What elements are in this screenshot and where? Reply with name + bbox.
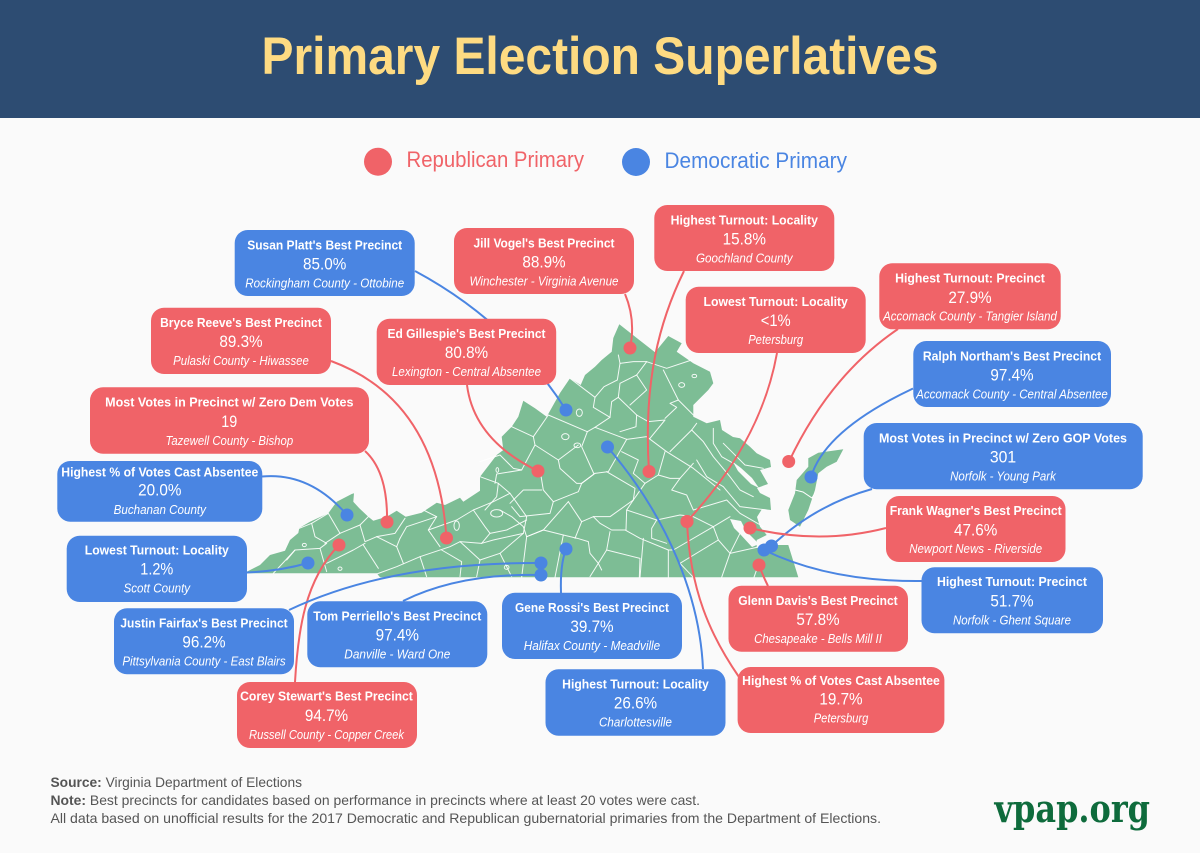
callout: Highest turnout Tangier: 27.9% bbox=[948, 289, 992, 307]
callout: Highest turnout Tangier bbox=[879, 263, 1061, 329]
callout: Ed Gillespie: Ed Gillespie's Best Precinct bbox=[388, 326, 546, 341]
callout: Frank Wagner bbox=[886, 496, 1066, 562]
callout: Highest absentee Petersburg: Highest % of Votes Cast Absentee bbox=[742, 673, 940, 688]
callout: Tom Perriello bbox=[307, 601, 487, 667]
legend: Republican Primary bbox=[406, 147, 584, 172]
callout: Most votes zero GOP bbox=[864, 423, 1143, 489]
callout: Most votes zero Dem: Most Votes in Precinct w/ Zero Dem Votes bbox=[105, 395, 353, 410]
connector: Gene Rossi bbox=[560, 542, 572, 593]
callout: Most votes zero Dem: Tazewell County - Bishop bbox=[165, 434, 293, 448]
callout: Highest turnout Goochland: Highest Turnout: Locality bbox=[671, 212, 819, 227]
callout: Highest turnout Ghent Square bbox=[922, 567, 1103, 633]
callout: Highest absentee Buchanan bbox=[57, 461, 262, 522]
callout: Corey Stewart: Corey Stewart's Best Precinct bbox=[240, 689, 413, 704]
callout: Jill Vogel: Winchester - Virginia Avenue bbox=[470, 274, 619, 288]
callout: Most votes zero GOP: Norfolk - Young Park bbox=[950, 470, 1057, 484]
callout: Highest absentee Buchanan: 20.0% bbox=[138, 482, 182, 500]
connector: Ghent Square bbox=[758, 544, 922, 581]
callout: Bryce Reeve: Pulaski County - Hiwassee bbox=[173, 354, 309, 368]
callout: Bryce Reeve: 89.3% bbox=[219, 333, 263, 351]
callout: Bryce Reeve: Bryce Reeve's Best Precinct bbox=[160, 315, 322, 330]
callout: Highest turnout Charlottesville: Highest Turnout: Locality bbox=[562, 676, 709, 692]
callout: Gene Rossi: 39.7% bbox=[570, 618, 614, 636]
callout: Lowest turnout Scott: Scott County bbox=[123, 582, 191, 596]
callout: Highest turnout Tangier: Highest Turnout: Precinct bbox=[895, 271, 1045, 286]
callout: Highest absentee Petersburg: Petersburg bbox=[814, 712, 868, 726]
callout: Lowest turnout Scott: 1.2% bbox=[140, 560, 174, 578]
callout: Highest turnout Charlottesville: Charlottesville bbox=[599, 716, 672, 730]
callout: Highest turnout Charlottesville bbox=[546, 669, 726, 736]
callout: Frank Wagner: 47.6% bbox=[954, 522, 998, 540]
connector: Frank Wagner bbox=[744, 522, 886, 536]
callout: Corey Stewart: Russell County - Copper Creek bbox=[249, 728, 405, 742]
callout: Most votes zero Dem: 19 bbox=[221, 413, 237, 431]
callout: Tom Perriello: Tom Perriello's Best Precinct bbox=[313, 608, 482, 624]
callout: Glenn Davis: Glenn Davis's Best Precinct bbox=[738, 593, 898, 608]
map of Virginia localities bbox=[247, 324, 843, 577]
callout: Highest turnout Goochland: Goochland County bbox=[696, 251, 793, 265]
callout: Lowest turnout Petersburg: Petersburg bbox=[748, 333, 803, 347]
connector: Jill Vogel bbox=[624, 294, 636, 354]
connector: Ralph Northam bbox=[804, 388, 913, 484]
callout: Jill Vogel: Jill Vogel's Best Precinct bbox=[474, 235, 615, 250]
callout: Tom Perriello: 97.4% bbox=[376, 626, 419, 644]
logo: vpap.org: vpap.org bbox=[994, 786, 1150, 831]
source and notes: Source: Virginia Department of Elections bbox=[50, 774, 302, 790]
callout: Glenn Davis: 57.8% bbox=[796, 611, 840, 629]
callout: Susan Platt bbox=[235, 230, 415, 296]
connector: Petersburg absentee bbox=[680, 515, 739, 677]
callout: Tom Perriello: Danville - Ward One bbox=[344, 648, 450, 662]
callout: Gene Rossi bbox=[502, 593, 682, 659]
callout: Gene Rossi: Gene Rossi's Best Precinct bbox=[515, 600, 670, 615]
connector: Tangier Island bbox=[782, 329, 898, 468]
source and notes: All data based on unofficial results for the 2017 Democratic and Republican gubernatorial primaries from the Department of Elections. bbox=[50, 810, 881, 826]
callout: Justin Fairfax: 96.2% bbox=[182, 634, 226, 652]
callout: Highest turnout Ghent Square: 51.7% bbox=[990, 592, 1034, 610]
source and notes bbox=[50, 774, 881, 826]
callout: Susan Platt: 85.0% bbox=[303, 256, 347, 274]
callout: Ralph Northam: Accomack County - Central Absentee bbox=[915, 388, 1108, 402]
callout: Highest turnout Goochland bbox=[654, 205, 834, 271]
callout: Justin Fairfax bbox=[114, 608, 294, 674]
west county lines bbox=[273, 468, 527, 577]
connector: Petersburg lowest turnout bbox=[680, 353, 777, 528]
callout: Lowest turnout Petersburg: Lowest Turnout: Locality bbox=[704, 294, 848, 309]
callout: Highest turnout Goochland: 15.8% bbox=[723, 230, 766, 248]
callout: Susan Platt: Rockingham County - Ottobine bbox=[245, 276, 404, 290]
connector: Tom Perriello bbox=[403, 568, 548, 601]
east and south county lines bbox=[500, 374, 767, 577]
source and notes: Note: Best precincts for candidates based on performance in precincts where at least 20 votes were cast. bbox=[50, 792, 700, 808]
legend bbox=[364, 147, 847, 176]
callout: Susan Platt: Susan Platt's Best Precinct bbox=[247, 237, 403, 252]
callout: Highest turnout Charlottesville: 26.6% bbox=[614, 695, 657, 713]
callout: Corey Stewart: 94.7% bbox=[305, 707, 348, 725]
callout: Bryce Reeve bbox=[151, 308, 331, 374]
callout: Most votes zero GOP: 301 bbox=[990, 448, 1016, 466]
callout: Jill Vogel bbox=[454, 228, 634, 294]
connector: Most votes zero GOP bbox=[765, 489, 872, 552]
connector: Corey Stewart bbox=[295, 538, 346, 682]
callout: Highest absentee Petersburg: 19.7% bbox=[819, 690, 863, 708]
callout: Ralph Northam: Ralph Northam's Best Precinct bbox=[923, 348, 1102, 363]
callout: Lowest turnout Scott: Lowest Turnout: Locality bbox=[85, 542, 229, 558]
header band with title: Primary Election Superlatives bbox=[262, 27, 938, 86]
callout: Highest turnout Ghent Square: Highest Turnout: Precinct bbox=[937, 574, 1088, 589]
connector: Susan Platt bbox=[415, 271, 572, 416]
callout: Corey Stewart bbox=[237, 682, 417, 748]
callout: Ralph Northam: 97.4% bbox=[990, 366, 1034, 384]
legend: Democratic Primary bbox=[664, 148, 847, 173]
connector: Buchanan absentee bbox=[262, 476, 354, 522]
callout: Most votes zero GOP: Most Votes in Precinct w/ Zero GOP Votes bbox=[879, 430, 1127, 445]
callout: Jill Vogel: 88.9% bbox=[522, 254, 566, 272]
callout: Glenn Davis bbox=[728, 586, 908, 652]
connector: Justin Fairfax bbox=[289, 556, 548, 610]
callout: Justin Fairfax: Pittsylvania County - East Blairs bbox=[122, 654, 286, 668]
callout: Ralph Northam bbox=[913, 341, 1111, 407]
connector: Scott County bbox=[247, 556, 314, 572]
callout: Highest turnout Tangier: Accomack County - Tangier Island bbox=[882, 310, 1058, 324]
callout: Glenn Davis: Chesapeake - Bells Mill II bbox=[754, 632, 882, 646]
connector: Charlottesville bbox=[601, 440, 703, 669]
connector: Most votes zero Dem bbox=[365, 451, 394, 528]
callout: Lowest turnout Petersburg: <1% bbox=[761, 312, 791, 330]
callout: Ed Gillespie: 80.8% bbox=[445, 344, 488, 362]
callout: Frank Wagner: Frank Wagner's Best Precinct bbox=[890, 503, 1062, 518]
connector: Bryce Reeve bbox=[331, 361, 453, 544]
north and central county lines bbox=[480, 355, 720, 490]
connector: Goochland bbox=[642, 271, 684, 478]
callout: Highest absentee Buchanan: Buchanan County bbox=[114, 503, 207, 517]
callout: Lowest turnout Petersburg bbox=[686, 287, 866, 353]
callout: Justin Fairfax: Justin Fairfax's Best Precinct bbox=[120, 616, 288, 630]
callout: Gene Rossi: Halifax County - Meadville bbox=[524, 639, 660, 653]
callout: Highest absentee Petersburg bbox=[738, 667, 944, 733]
callout: Frank Wagner: Newport News - Riverside bbox=[909, 542, 1042, 556]
connector: Glenn Davis bbox=[752, 558, 768, 586]
callout: Highest absentee Buchanan: Highest % of Votes Cast Absentee bbox=[61, 465, 258, 480]
callout: Ed Gillespie bbox=[377, 319, 556, 385]
callout: Most votes zero Dem bbox=[90, 387, 369, 454]
callout: Lowest turnout Scott bbox=[67, 536, 247, 602]
connector: Ed Gillespie bbox=[467, 385, 544, 478]
header band with title bbox=[0, 0, 1200, 118]
callout: Ed Gillespie: Lexington - Central Absentee bbox=[392, 365, 541, 379]
callout: Highest turnout Ghent Square: Norfolk - Ghent Square bbox=[953, 614, 1071, 628]
